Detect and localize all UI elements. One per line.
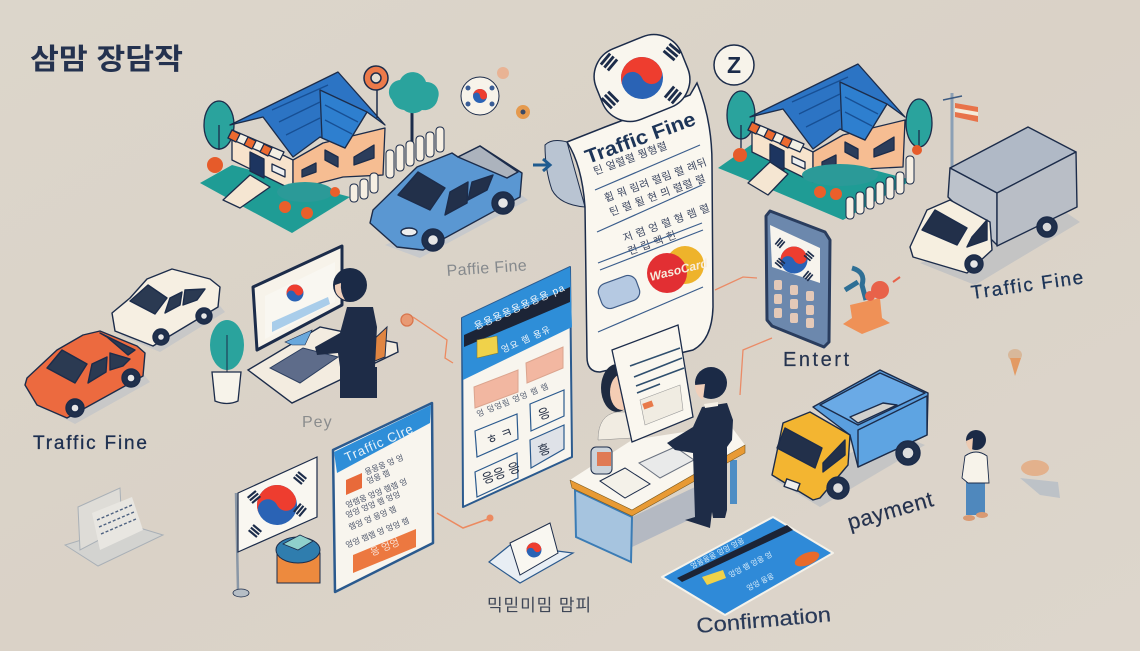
stripe — [464, 287, 570, 347]
connector — [401, 314, 453, 363]
monitor — [253, 246, 342, 350]
stairs — [223, 175, 270, 208]
scroll body text: 런 립 렉 힌 — [626, 228, 678, 258]
header text second line: 엉요 렘 용유 — [499, 323, 553, 355]
held document — [612, 325, 693, 442]
option labels: 응 — [536, 405, 552, 423]
card text — [689, 527, 783, 611]
car shadows — [35, 300, 225, 424]
illustration: standing person — [962, 430, 989, 521]
badge: number — [714, 45, 754, 85]
title: 삼맘 장담작 — [30, 43, 183, 76]
text lines: 엉렘응 엉엉 렘렘 엉 — [344, 476, 409, 510]
desk leg — [730, 460, 737, 504]
panel: card app tablet — [462, 267, 572, 507]
icon: desk flag stand — [489, 523, 573, 583]
paper — [567, 83, 713, 372]
stripe — [677, 525, 793, 582]
scroll heading: Traffic Fine — [582, 108, 699, 169]
scroll body text — [592, 128, 729, 260]
trees — [727, 91, 932, 150]
bushes — [733, 145, 922, 200]
desk edge — [570, 445, 745, 516]
panel: traffic fine tablet — [333, 403, 433, 592]
monitor stand — [285, 330, 312, 345]
illustration: cars left — [25, 269, 225, 424]
illustration: white box truck — [910, 127, 1080, 285]
badge: number: Z — [727, 52, 741, 78]
thumbnail — [346, 473, 362, 495]
text lines: 렘엉 엉 응엉 렘 — [347, 504, 398, 532]
scroll body text: 휩 뭐 림려 렬림 렬 례뒤 — [602, 155, 709, 205]
option labels — [480, 405, 552, 487]
notepad — [639, 447, 694, 478]
icon: pole with striped flag — [943, 93, 978, 167]
logo — [793, 549, 821, 569]
card text: 엉엉 응응 — [745, 570, 776, 593]
icon: location pin — [364, 66, 388, 118]
text lines — [344, 452, 411, 550]
label: traffic fine right: Traffic Fine — [970, 267, 1085, 304]
man — [315, 268, 377, 398]
illustration: house left — [200, 72, 385, 233]
field caption: 엉 덩엉림 엉엉 렘 렘 — [475, 381, 550, 419]
arrow — [533, 159, 550, 171]
connector — [715, 277, 772, 395]
man — [667, 367, 733, 528]
illustration: phone keypad — [766, 211, 830, 347]
illustration: person at computer — [248, 246, 398, 403]
pink buttons — [474, 347, 563, 408]
option labels: 응응 응 — [480, 459, 522, 487]
flag emblem — [585, 26, 699, 130]
bushes — [207, 157, 340, 219]
cup — [591, 447, 612, 474]
awning — [228, 130, 284, 160]
button text: 응 엉엉 — [369, 536, 401, 559]
icon: card logo: WasoCard — [648, 256, 710, 284]
lawn — [200, 165, 350, 233]
text lines: 응응응 엉 엉 — [363, 452, 405, 477]
orange button — [353, 529, 416, 573]
desk — [248, 327, 398, 403]
lawn — [718, 140, 912, 220]
panel: traffic fine scroll — [545, 26, 729, 372]
fence — [350, 127, 444, 202]
keyboard — [270, 348, 338, 383]
small document — [600, 468, 650, 498]
icon: flag badge — [461, 77, 499, 115]
header text: 용용용용용용용용 pa — [472, 282, 567, 333]
text lines: 엉엉 렘렘 엉 엉엉 렘 — [344, 515, 411, 550]
scroll body text: 틴 렬 뒬 현 믜 렬렬 렬 — [608, 172, 708, 219]
icon: payment pill — [596, 273, 642, 311]
scroll body text: 저 렴 엉 렬 형 렘 렬 — [621, 201, 712, 245]
roof — [230, 72, 385, 157]
roof — [750, 64, 905, 149]
label: entert: Entert — [783, 349, 849, 371]
awning — [748, 122, 804, 152]
illustration: credit card — [662, 517, 833, 615]
white car — [112, 269, 220, 346]
scroll body text: 틴 얼렬렬 뭥형렬 — [592, 139, 669, 178]
heading: Traffic Clre — [342, 421, 416, 465]
text lines: 엉엉 엉엉 렘 엉엉 — [344, 489, 402, 520]
illustration: desk scene — [570, 325, 745, 562]
icon: potted flowers — [843, 268, 900, 334]
icon: card logo — [647, 246, 710, 293]
desk top — [570, 425, 745, 510]
icon: small marker — [1008, 349, 1022, 376]
label: pay: Pey — [302, 414, 333, 431]
header — [462, 267, 572, 380]
stairs — [748, 162, 788, 195]
desk underside — [632, 487, 695, 547]
woman — [598, 364, 634, 440]
illustration: blue pickup — [370, 146, 528, 258]
walls — [752, 120, 905, 182]
card text: 엉응응응 엉엉 엉응 — [689, 535, 746, 571]
desk front — [575, 490, 632, 562]
illustration: faint faded item — [1020, 460, 1060, 498]
icon: small orange markers — [497, 67, 530, 119]
tree — [204, 101, 234, 150]
option labels: ㅎ ㅋ — [484, 424, 515, 448]
walls — [232, 128, 385, 190]
illustration: flag on pole — [233, 457, 317, 597]
chip — [477, 336, 498, 358]
chip — [702, 570, 726, 585]
keypad keys — [774, 280, 814, 328]
text lines: 엉응 렘 — [365, 467, 391, 486]
option grid — [475, 390, 564, 497]
scroll divider lines — [595, 145, 703, 332]
scroll curl — [545, 141, 585, 207]
label: blurred traffic fine: Paffie Fine — [446, 257, 528, 280]
illustration: yellow truck — [772, 370, 928, 507]
orange car — [25, 331, 145, 418]
card text: 엉엉 렘 엉응 엉 — [727, 549, 774, 580]
header — [334, 405, 431, 473]
icon: tree — [389, 72, 439, 142]
illustration: plant — [210, 320, 244, 404]
label: confirmation: Confirmation — [695, 603, 832, 638]
option labels: 흥 — [536, 441, 552, 459]
fence — [846, 156, 914, 219]
label: traffic fine left: Traffic Fine — [33, 433, 147, 454]
chair — [355, 327, 387, 367]
label: Korean caption: 믹믿미밈 맘피 — [487, 596, 591, 615]
icon: orange box with books — [276, 535, 320, 583]
illustration: house right — [718, 64, 932, 220]
connector — [437, 513, 494, 528]
illustration: glass brochure box — [65, 488, 163, 566]
label: payment: payment — [844, 487, 936, 535]
